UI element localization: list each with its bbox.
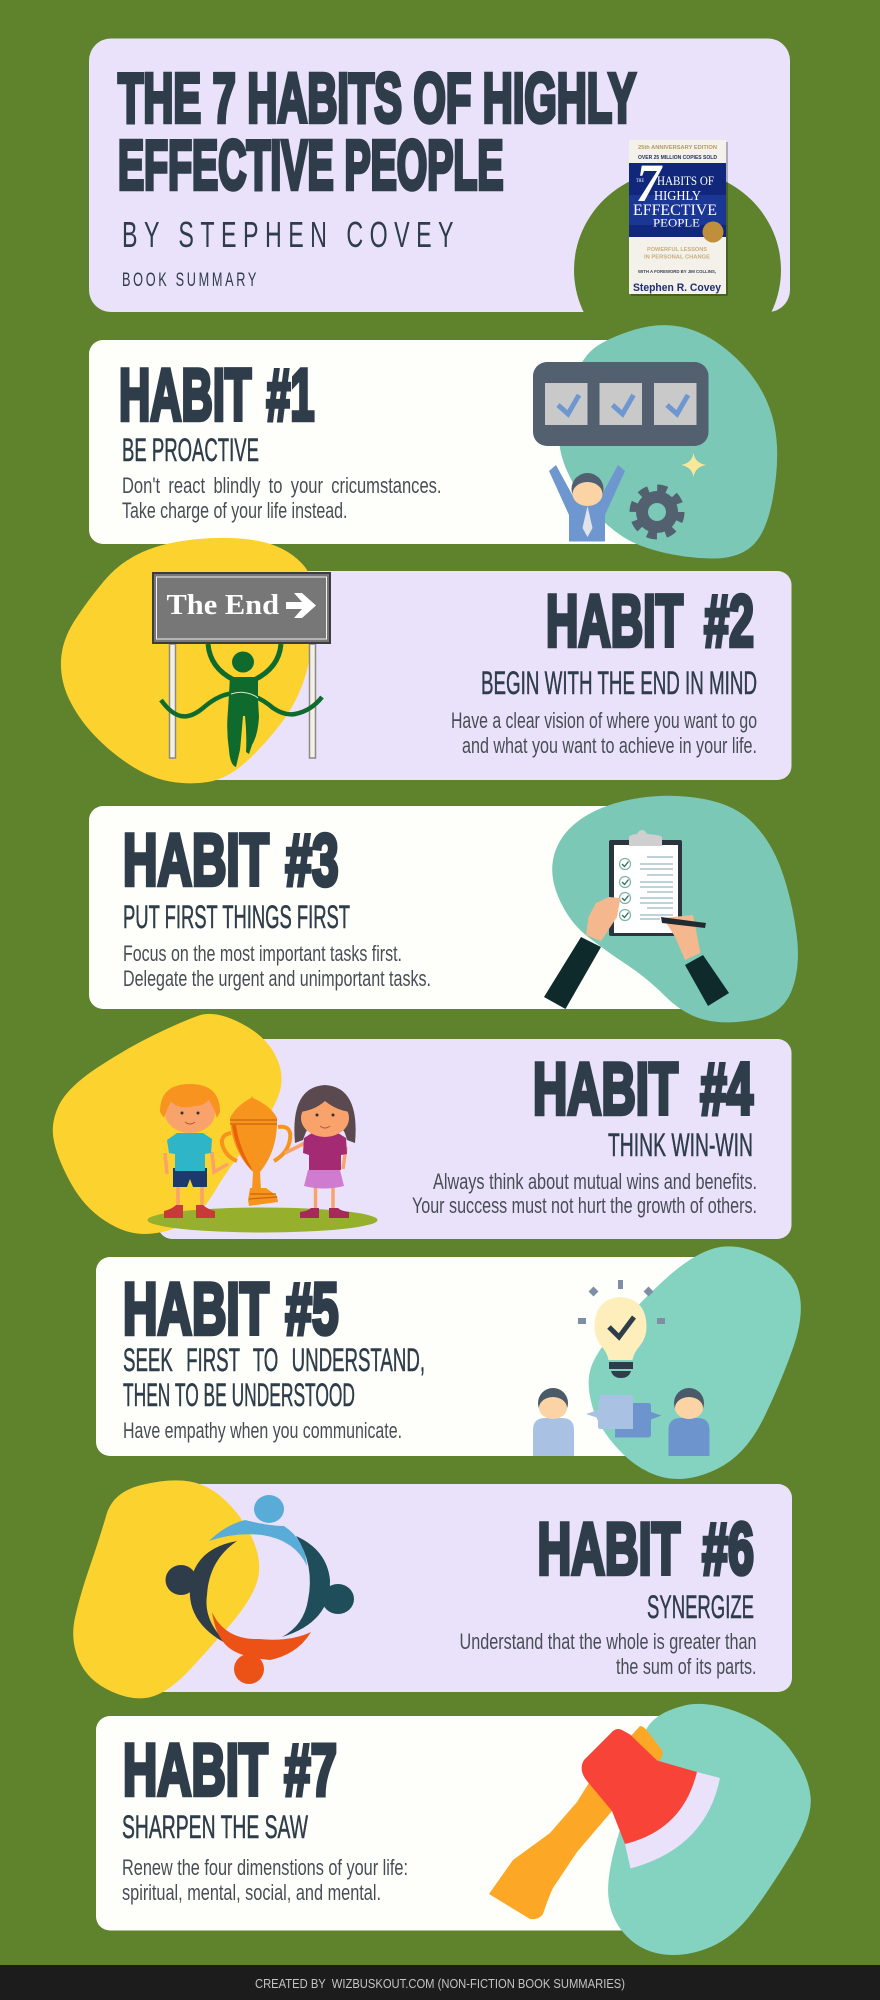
blob: teal <box>608 1704 811 1955</box>
heading: HABIT #7 <box>123 1730 337 1811</box>
icon: circle of people <box>166 1495 354 1684</box>
panel: habit 5 <box>96 1246 801 1479</box>
description <box>460 1629 756 1679</box>
blob: teal <box>559 325 777 559</box>
description: Focus on the most important tasks first. <box>123 941 402 966</box>
description <box>122 473 442 523</box>
description: Understand that the whole is greater than <box>460 1629 756 1654</box>
panel: habit 2 <box>61 538 791 783</box>
subheading: SYNERGIZE <box>647 1589 754 1625</box>
icon: two people talking <box>533 1388 710 1456</box>
illustration: finish line <box>152 572 331 767</box>
book cover: POWERFUL LESSONS <box>647 247 708 253</box>
footer <box>0 1965 880 2000</box>
book cover: Stephen R. Covey <box>633 282 722 294</box>
heading: HABIT #6 <box>538 1509 754 1590</box>
author line: BY STEPHEN COVEY <box>122 214 460 255</box>
description: and what you want to achieve in your life. <box>462 733 757 758</box>
heading: HABIT #2 <box>546 581 754 662</box>
subheading: SEEK FIRST TO UNDERSTAND, <box>123 1342 425 1378</box>
illustration: finish line: The End <box>166 590 279 621</box>
icon: axe <box>489 1726 720 1919</box>
girl <box>285 1085 356 1218</box>
icon: checklist board <box>533 362 708 446</box>
heading: HABIT #4 <box>533 1049 753 1130</box>
description <box>412 1169 757 1218</box>
heading: HABIT #5 <box>123 1269 338 1350</box>
description: Don't react blindly to your cricumstances. <box>122 473 442 498</box>
book cover: WITH A FOREWORD BY JIM COLLINS, <box>638 269 716 274</box>
panel: habit 1 <box>89 325 777 559</box>
icon: gear <box>633 488 681 536</box>
description: the sum of its parts. <box>616 1654 756 1679</box>
book cover: 25th ANNIVERSARY EDITION <box>638 145 717 151</box>
description: Renew the four dimenstions of your life: <box>122 1855 408 1880</box>
description <box>123 941 431 991</box>
heading: HABIT #3 <box>123 820 338 901</box>
title: EFFECTIVE PEOPLE <box>118 126 503 204</box>
subheading: SHARPEN THE SAW <box>122 1809 308 1845</box>
subheading <box>123 1342 425 1413</box>
illustration: clipboard and hands <box>544 830 729 1009</box>
blob: teal <box>589 1246 801 1479</box>
subheading: THINK WIN-WIN <box>608 1127 753 1163</box>
subtitle: BOOK SUMMARY <box>122 270 259 291</box>
book cover: PEOPLE <box>653 216 700 230</box>
panel: habit 3 <box>89 796 798 1022</box>
blob: yellow <box>73 1480 259 1698</box>
description: Delegate the urgent and unimportant tasks. <box>123 966 431 991</box>
blob: yellow <box>53 1014 282 1234</box>
illustration: kids with trophy <box>148 1084 378 1232</box>
subheading: BE PROACTIVE <box>122 432 259 468</box>
book cover: THE <box>636 179 644 184</box>
subheading: THEN TO BE UNDERSTOOD <box>123 1377 355 1413</box>
description: spiritual, mental, social, and mental. <box>122 1880 381 1905</box>
book cover: IN PERSONAL CHANGE <box>644 254 711 260</box>
subheading: PUT FIRST THINGS FIRST <box>123 899 350 935</box>
boy <box>160 1084 228 1218</box>
panel: title header <box>89 38 790 370</box>
footer: CREATED BY WIZBUSKOUT.COM (NON-FICTION BOOK SUMMARIES) <box>255 1976 625 1991</box>
book cover: EFFECTIVE <box>633 202 717 219</box>
panel: habit 7 <box>96 1704 811 1955</box>
panel: habit 6 <box>73 1480 792 1698</box>
blob: yellow <box>61 538 316 783</box>
book cover: HABITS OF <box>657 173 714 188</box>
book cover <box>629 140 728 296</box>
panel: habit 4 <box>53 1014 792 1239</box>
blob: teal <box>552 796 798 1022</box>
description <box>122 1855 408 1905</box>
book cover: 7 <box>636 153 663 213</box>
book cover: HIGHLY <box>654 189 701 204</box>
icon: light bulb <box>578 1280 665 1378</box>
description: Have a clear vision of where you want to go <box>451 708 757 733</box>
description: Always think about mutual wins and benefits. <box>433 1169 757 1194</box>
book cover: OVER 25 MILLION COPIES SOLD <box>638 155 717 161</box>
icon: person raising arms <box>549 465 625 542</box>
description <box>451 708 757 758</box>
icon: sparkle <box>681 453 706 477</box>
title <box>118 59 636 204</box>
description: Your success must not hurt the growth of others. <box>412 1193 757 1218</box>
description: Have empathy when you communicate. <box>123 1418 402 1443</box>
description: Take charge of your life instead. <box>122 498 348 523</box>
trophy <box>222 1096 290 1206</box>
heading: HABIT #1 <box>119 355 314 436</box>
